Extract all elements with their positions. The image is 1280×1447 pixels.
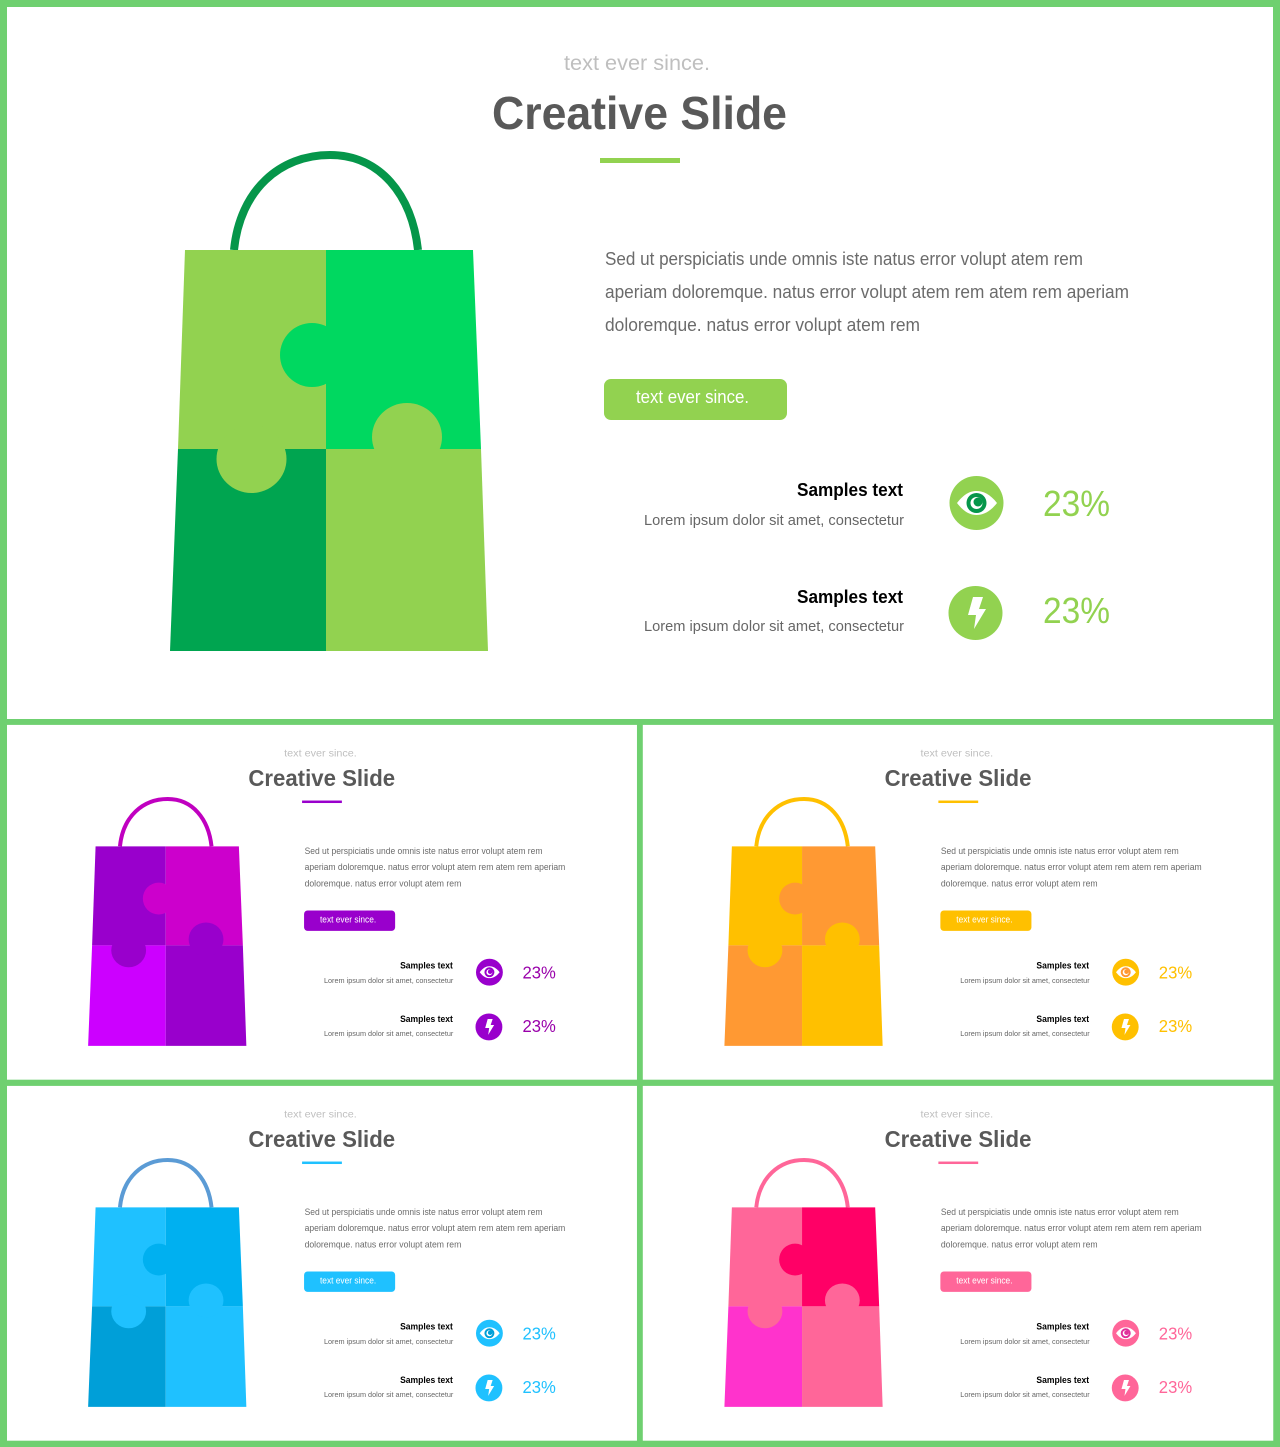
panel: blue slide <box>7 1086 637 1441</box>
row 1 text: Samples text <box>1036 1322 1089 1332</box>
paragraph: doloremque. natus error volupt atem rem <box>941 879 1098 889</box>
shopping bag puzzle <box>724 1160 883 1407</box>
icon: eye <box>950 476 1004 530</box>
row 1 text <box>324 1322 454 1346</box>
row 2 percent: 23% <box>1159 1016 1192 1036</box>
row 1 text: Samples text <box>797 480 903 500</box>
row 2 text: Lorem ipsum dolor sit amet, consectetur <box>324 1029 454 1038</box>
panel: main green slide <box>7 7 1273 719</box>
shopping bag puzzle <box>724 799 883 1046</box>
icon: eye <box>476 1320 503 1347</box>
paragraph <box>941 1207 1202 1250</box>
icon: lightning bolt <box>1112 1014 1139 1040</box>
icon: lightning bolt <box>475 1014 502 1040</box>
icon: lightning bolt <box>1112 1375 1139 1401</box>
row 1 text: Samples text <box>400 1322 453 1332</box>
row 2 text: Samples text <box>400 1014 453 1024</box>
title: Creative Slide <box>248 765 395 791</box>
icon: eye <box>1112 1320 1139 1347</box>
button <box>304 1272 395 1292</box>
title: Creative Slide <box>248 1126 395 1152</box>
row 2 text <box>324 1375 454 1399</box>
button <box>940 1272 1031 1292</box>
icon: eye <box>1112 959 1139 986</box>
button <box>940 911 1031 931</box>
row 2 percent: 23% <box>523 1016 556 1036</box>
panel: yellow slide <box>643 725 1273 1080</box>
row 1 text: Lorem ipsum dolor sit amet, consectetur <box>324 976 454 985</box>
button: text ever since. <box>956 914 1013 924</box>
shopping bag puzzle <box>88 1160 246 1407</box>
row 2 text: Samples text <box>1036 1375 1089 1385</box>
row 1 percent: 23% <box>1043 483 1110 524</box>
icon: lightning bolt <box>475 1375 502 1401</box>
paragraph: Sed ut perspiciatis unde omnis iste natus error volupt atem rem <box>305 1207 542 1217</box>
title: Creative Slide <box>492 87 787 139</box>
paragraph: aperiam doloremque. natus error volupt atem rem atem rem aperiam <box>941 862 1202 872</box>
paragraph <box>305 846 565 889</box>
button <box>604 379 787 420</box>
paragraph: Sed ut perspiciatis unde omnis iste natus error volupt atem rem <box>305 846 542 856</box>
row 1 percent: 23% <box>523 1324 556 1344</box>
row 2 text <box>960 1375 1090 1399</box>
button <box>304 911 395 931</box>
panel: purple slide <box>7 725 637 1080</box>
paragraph: doloremque. natus error volupt atem rem <box>305 879 461 889</box>
row 1 text: Lorem ipsum dolor sit amet, consectetur <box>324 1337 454 1346</box>
row 1 text: Lorem ipsum dolor sit amet, consectetur <box>644 512 904 529</box>
paragraph: aperiam doloremque. natus error volupt atem rem atem rem aperiam <box>305 1223 565 1233</box>
row 1 percent: 23% <box>1159 963 1192 983</box>
row 1 text <box>324 961 454 985</box>
icon: eye <box>476 959 503 986</box>
row 2 percent: 23% <box>523 1377 556 1397</box>
button: text ever since. <box>320 914 376 924</box>
title underline <box>938 801 978 803</box>
row 1 percent: 23% <box>1159 1324 1192 1344</box>
panel: pink slide <box>643 1086 1273 1441</box>
paragraph: aperiam doloremque. natus error volupt atem rem atem rem aperiam <box>941 1223 1202 1233</box>
row 2 text: Samples text <box>1036 1014 1089 1024</box>
row 1 text: Samples text <box>1036 961 1089 971</box>
subtitle: text ever since. <box>920 749 993 760</box>
paragraph: Sed ut perspiciatis unde omnis iste natus error volupt atem rem <box>941 846 1179 856</box>
subtitle: text ever since. <box>920 1110 993 1121</box>
subtitle: text ever since. <box>564 52 710 75</box>
paragraph: doloremque. natus error volupt atem rem <box>305 1240 461 1250</box>
title: Creative Slide <box>885 765 1031 791</box>
paragraph <box>605 249 1129 335</box>
button: text ever since. <box>320 1275 376 1285</box>
shopping bag puzzle <box>88 799 246 1046</box>
paragraph <box>305 1207 565 1250</box>
row 2 text <box>324 1014 454 1038</box>
paragraph: aperiam doloremque. natus error volupt atem rem atem rem aperiam <box>305 862 565 872</box>
paragraph: Sed ut perspiciatis unde omnis iste natus error volupt atem rem <box>941 1207 1179 1217</box>
row 2 text: Samples text <box>797 587 903 607</box>
paragraph: Sed ut perspiciatis unde omnis iste natus error volupt atem rem <box>605 249 1083 269</box>
paragraph: aperiam doloremque. natus error volupt atem rem atem rem aperiam <box>605 282 1129 302</box>
title: Creative Slide <box>885 1126 1031 1152</box>
row 2 text: Lorem ipsum dolor sit amet, consectetur <box>960 1390 1090 1399</box>
row 2 percent: 23% <box>1043 590 1110 631</box>
row 1 text: Samples text <box>400 961 453 971</box>
row 2 text: Lorem ipsum dolor sit amet, consectetur <box>960 1029 1090 1038</box>
subtitle: text ever since. <box>284 1110 357 1121</box>
title underline <box>302 801 342 803</box>
icon: lightning bolt <box>948 586 1002 640</box>
row 1 text: Lorem ipsum dolor sit amet, consectetur <box>960 1337 1090 1346</box>
row 2 text: Lorem ipsum dolor sit amet, consectetur <box>324 1390 454 1399</box>
shopping bag puzzle <box>170 155 488 651</box>
row 2 text <box>644 587 904 635</box>
title underline <box>600 158 680 163</box>
button: text ever since. <box>956 1275 1013 1285</box>
title underline <box>938 1162 978 1164</box>
row 2 percent: 23% <box>1159 1377 1192 1397</box>
title underline <box>302 1162 342 1164</box>
row 1 percent: 23% <box>523 963 556 983</box>
row 1 text <box>960 961 1090 985</box>
subtitle: text ever since. <box>284 749 357 760</box>
paragraph: doloremque. natus error volupt atem rem <box>941 1240 1098 1250</box>
paragraph <box>941 846 1202 889</box>
paragraph: doloremque. natus error volupt atem rem <box>605 315 920 335</box>
button: text ever since. <box>636 387 749 407</box>
row 2 text: Samples text <box>400 1375 453 1385</box>
row 2 text: Lorem ipsum dolor sit amet, consectetur <box>644 618 904 635</box>
row 1 text: Lorem ipsum dolor sit amet, consectetur <box>960 976 1090 985</box>
row 1 text <box>960 1322 1090 1346</box>
row 1 text <box>644 480 904 529</box>
row 2 text <box>960 1014 1090 1038</box>
